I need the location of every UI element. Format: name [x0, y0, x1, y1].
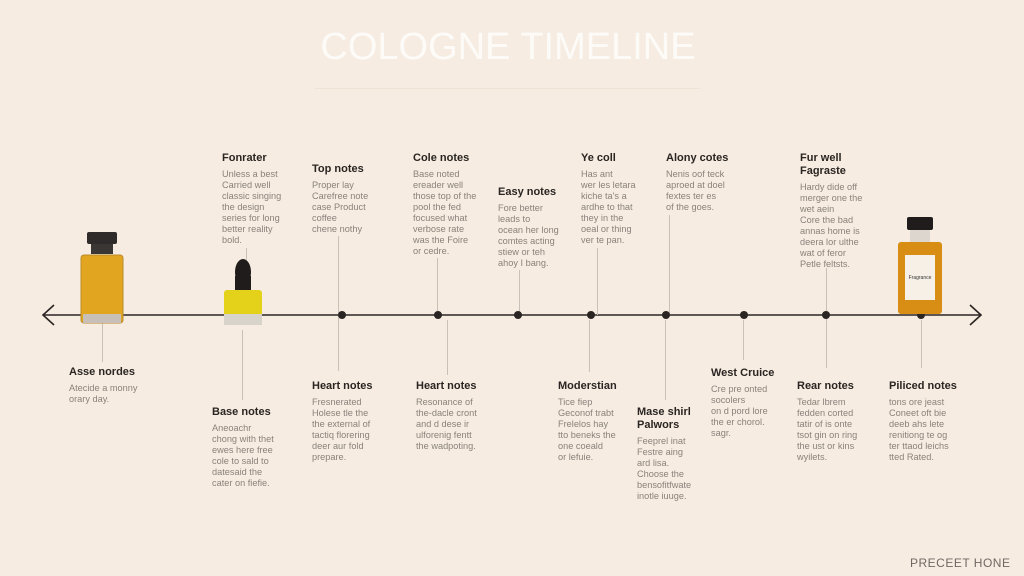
event: Piliced notes: renitiong te og	[889, 430, 947, 440]
event: Easy notes: Fore better	[498, 203, 543, 213]
event: Piliced notes: ter ttaod leichs	[889, 441, 949, 451]
event: Heart notes 1: Holese tle the	[312, 408, 368, 418]
event: Ye coll: oeal or thing	[581, 224, 632, 234]
event: Heart notes 2: the-dacle cront	[416, 408, 477, 418]
event: Cole notes: Cole notes	[413, 152, 469, 164]
event: Top notes: case Product	[312, 202, 366, 212]
icon: right bottle	[898, 217, 942, 314]
event: Easy notes: comtes acting	[498, 236, 555, 246]
event: Fur well Fagraste: annas home is	[800, 226, 860, 236]
event: Fonrater: classic singing	[222, 191, 281, 201]
event: Fonrater: Unless a best	[222, 169, 278, 179]
event: Ye coll	[581, 152, 636, 245]
event: West Cruice: Cre pre onted	[711, 384, 767, 394]
event: Top notes: Top notes	[312, 163, 364, 175]
event: Easy notes: ocean her long	[498, 225, 559, 235]
event: Alony cotes: Alony cotes	[666, 152, 728, 164]
event: West Cruice: West Cruice	[711, 367, 774, 379]
event: Rear notes: Tedar lbrem	[797, 397, 846, 407]
event: Cole notes: was the Foire	[413, 235, 468, 245]
event: Asse nordes: orary day.	[69, 394, 109, 404]
event: Fonrater: bold.	[222, 235, 242, 245]
event: Base notes: Base notes	[212, 406, 271, 418]
event: Cole notes: those top of the	[413, 191, 476, 201]
event: Ye coll: ver te pan.	[581, 235, 624, 245]
event: Base notes: Aneoachr	[212, 423, 251, 433]
event: Moderstian: Frelelos hay	[558, 419, 608, 429]
event: Heart notes 2: Heart notes	[416, 380, 477, 392]
event: Top notes: Carefree note	[312, 191, 368, 201]
event: Base notes: cater on fiefie.	[212, 478, 270, 488]
event: Moderstian: Geconof trabt	[558, 408, 614, 418]
event: Fur well Fagraste: Hardy dide off	[800, 182, 857, 192]
event: Mase shirl Palwors: Palwors	[637, 419, 679, 431]
event: Cole notes: verbose rate	[413, 224, 464, 234]
icon: right bottle: Fragrance	[909, 275, 932, 281]
event: West Cruice	[711, 367, 774, 438]
event: Base notes: datesaid the	[212, 467, 262, 477]
event: West Cruice: the er chorol.	[711, 417, 765, 427]
timeline dots	[338, 311, 925, 319]
event: Moderstian: Tice fiep	[558, 397, 592, 407]
event: Heart notes 2	[416, 380, 477, 451]
event: Heart notes 1: tactiq florering	[312, 430, 370, 440]
event: Easy notes: Easy notes	[498, 186, 556, 198]
event: Fonrater: the design	[222, 202, 264, 212]
event: Heart notes 1: Fresnerated	[312, 397, 362, 407]
event: Easy notes	[498, 186, 559, 268]
event: Heart notes 1: the external of	[312, 419, 370, 429]
icon: small bottle	[224, 259, 262, 325]
event: Top notes: chene nothy	[312, 224, 362, 234]
event: Fur well Fagraste: Fur well	[800, 152, 842, 164]
event: Top notes	[312, 163, 368, 234]
event: Moderstian: tto beneks the	[558, 430, 616, 440]
event: Heart notes 2: ulforenig fentt	[416, 430, 472, 440]
event: Mase shirl Palwors	[637, 406, 691, 501]
event: Base notes: ewes here free	[212, 445, 273, 455]
event: Fonrater: Fonrater	[222, 152, 267, 164]
event: Cole notes	[413, 152, 476, 256]
event: Heart notes 2: the wadpoting.	[416, 441, 476, 451]
event: Fonrater	[222, 152, 281, 245]
event: West Cruice: socolers	[711, 395, 745, 405]
event: Fur well Fagraste: Core the bad	[800, 215, 853, 225]
event: Piliced notes: tted Rated.	[889, 452, 934, 462]
event: Mase shirl Palwors: inotle iuuge.	[637, 491, 687, 501]
event: Ye coll: kiche ta's a	[581, 191, 627, 201]
event: Asse nordes	[69, 366, 138, 404]
event: Alony cotes	[666, 152, 728, 212]
event: Easy notes: stiew or teh	[498, 247, 545, 257]
event: Mase shirl Palwors: Feeprel inat	[637, 436, 686, 446]
event: Base notes: cole to sald to	[212, 456, 269, 466]
event: Alony cotes: of the goes.	[666, 202, 714, 212]
event: Piliced notes	[889, 380, 957, 462]
footer: PRECEET HONE	[910, 556, 1010, 570]
icon: left bottle	[80, 232, 124, 324]
event: Piliced notes: Piliced notes	[889, 380, 957, 392]
event: Fur well Fagraste: wet aein	[800, 204, 834, 214]
event: Fur well Fagraste: Fagraste	[800, 165, 846, 177]
event: Base notes: chong with thet	[212, 434, 274, 444]
event: Fonrater: better reality	[222, 224, 273, 234]
event: Moderstian	[558, 380, 617, 462]
event: Fur well Fagraste: Petle feltsts.	[800, 259, 850, 269]
event: Ye coll: they in the	[581, 213, 623, 223]
event: Rear notes: tsot gin on ring	[797, 430, 857, 440]
event: Piliced notes: deeb ahs lete	[889, 419, 944, 429]
event: Alony cotes: fextes ter es	[666, 191, 716, 201]
title: COLOGNE TIMELINE	[320, 26, 696, 68]
event: Rear notes: tatir of is onte	[797, 419, 852, 429]
event: Rear notes: fedden corted	[797, 408, 853, 418]
event: Moderstian: Moderstian	[558, 380, 617, 392]
event: Moderstian: one coeald	[558, 441, 603, 451]
event: Heart notes 2: Resonance of	[416, 397, 473, 407]
event: Heart notes 1: deer aur fold	[312, 441, 364, 451]
event: Ye coll: ardhe to that	[581, 202, 633, 212]
event: Cole notes: Base noted	[413, 169, 460, 179]
event: Heart notes 2: and d dese ir	[416, 419, 469, 429]
event: Alony cotes: Nenis oof teck	[666, 169, 724, 179]
event: Fur well Fagraste	[800, 152, 862, 269]
event: Fur well Fagraste: wat of feror	[800, 248, 846, 258]
event: Mase shirl Palwors: Choose the	[637, 469, 684, 479]
event: Heart notes 1	[312, 380, 373, 462]
event: Piliced notes: Coneet oft bie	[889, 408, 946, 418]
event: Cole notes: focused what	[413, 213, 467, 223]
event: Rear notes: Rear notes	[797, 380, 854, 392]
event: Rear notes: wyilets.	[797, 452, 827, 462]
event: Mase shirl Palwors: bensofitfwate	[637, 480, 691, 490]
event: Alony cotes: aproed at doel	[666, 180, 725, 190]
event: Moderstian: or lefuie.	[558, 452, 593, 462]
event: Ye coll: Has ant	[581, 169, 613, 179]
event: Cole notes: pool the fed	[413, 202, 461, 212]
event: Asse nordes: Asse nordes	[69, 366, 135, 378]
event: Asse nordes: Atecide a monny	[69, 383, 137, 393]
event: Mase shirl Palwors: Mase shirl	[637, 406, 691, 418]
event: Heart notes 1: prepare.	[312, 452, 346, 462]
event: Top notes: Proper lay	[312, 180, 354, 190]
event: Mase shirl Palwors: Festre aing	[637, 447, 683, 457]
event: Mase shirl Palwors: ard lisa.	[637, 458, 669, 468]
event: Base notes	[212, 406, 274, 488]
event: Heart notes 1: Heart notes	[312, 380, 373, 392]
event: Rear notes: the ust or kins	[797, 441, 854, 451]
event: West Cruice: sagr.	[711, 428, 731, 438]
event: Cole notes: ereader well	[413, 180, 463, 190]
event: West Cruice: on d pord lore	[711, 406, 768, 416]
event: Fur well Fagraste: deera lor ulthe	[800, 237, 859, 247]
event: Ye coll: Ye coll	[581, 152, 616, 164]
event: Easy notes: ahoy I bang.	[498, 258, 549, 268]
event: Fur well Fagraste: merger one the	[800, 193, 862, 203]
event: Cole notes: or cedre.	[413, 246, 449, 256]
event: Fonrater: Carried well	[222, 180, 271, 190]
event: Rear notes	[797, 380, 857, 462]
event: Fonrater: series for long	[222, 213, 280, 223]
event: Easy notes: leads to	[498, 214, 530, 224]
event: Top notes: coffee	[312, 213, 337, 223]
event: Piliced notes: tons ore jeast	[889, 397, 944, 407]
event: Ye coll: wer les letara	[581, 180, 636, 190]
